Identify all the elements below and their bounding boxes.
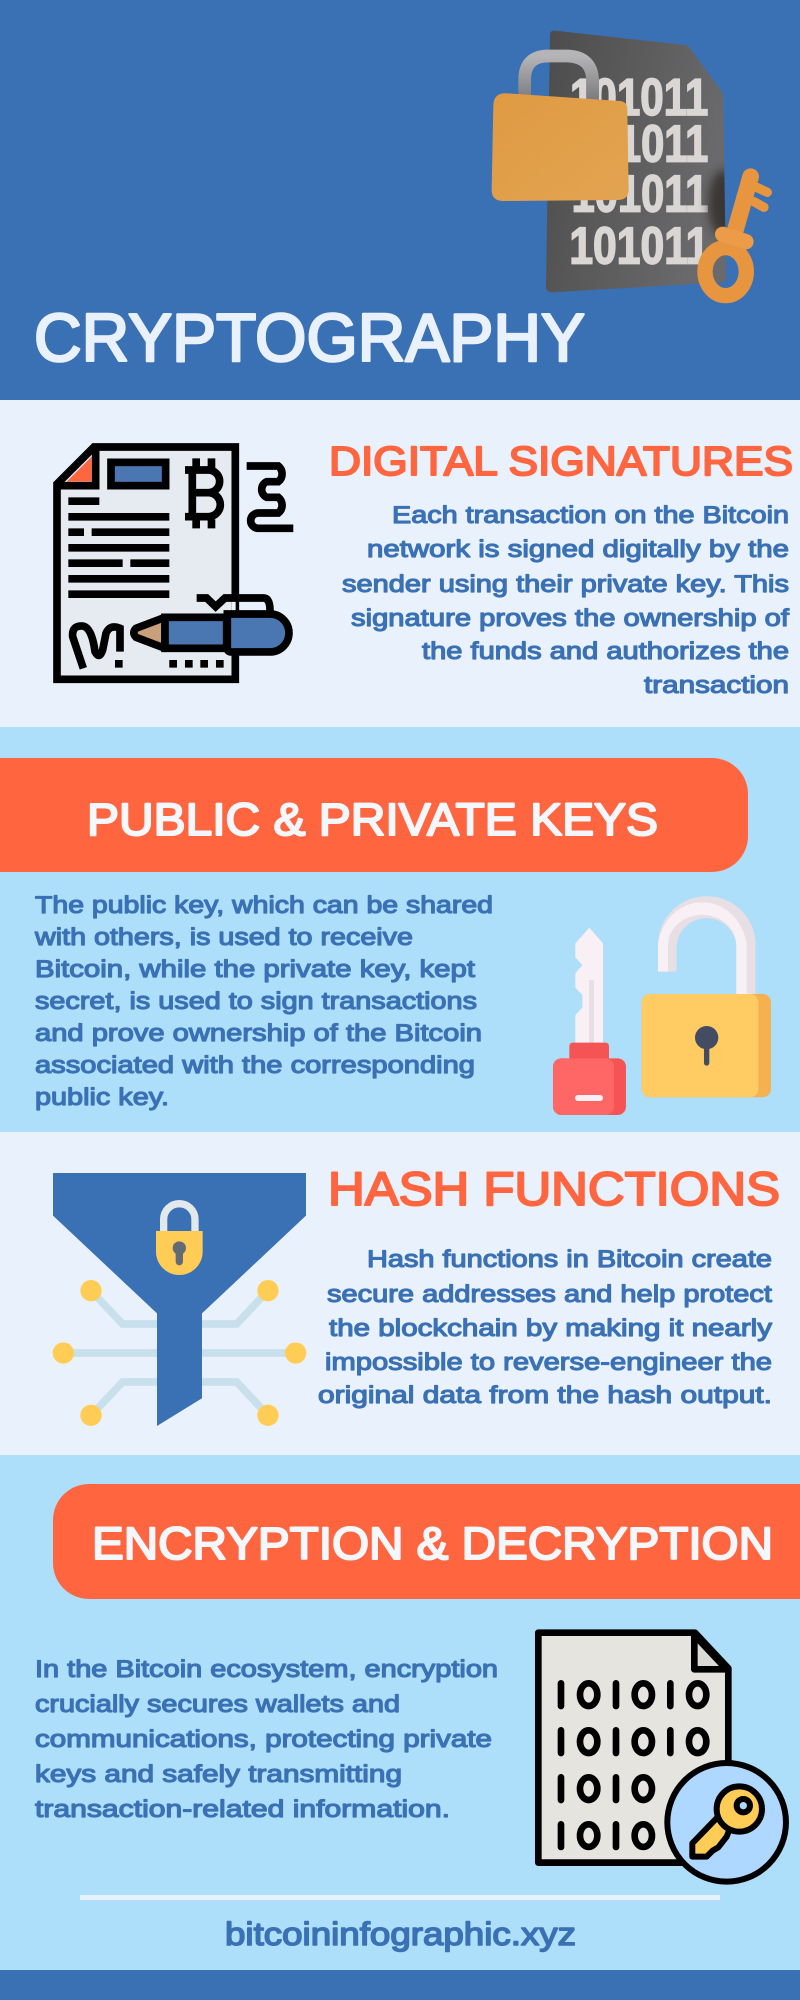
text block: public and private keys: public key. [35, 1084, 169, 1111]
heading banner: encryption and decryption: ENCRYPTION & DECRYPTION [92, 1518, 773, 1569]
heading: hash functions: HASH FUNCTIONS [328, 1162, 780, 1215]
text block: digital signatures [342, 502, 789, 699]
panel: header [0, 0, 800, 400]
panel: encryption and decryption [0, 1455, 800, 1970]
text block: hash functions [318, 1246, 773, 1409]
text block: digital signatures: sender using their private key. This [342, 571, 789, 598]
text block: hash functions: original data from the hash output. [318, 1382, 772, 1409]
title: CRYPTOGRAPHY [34, 300, 585, 376]
text block: public and private keys: secret, is used to sign transactions [35, 988, 477, 1015]
panel: public and private keys [0, 727, 800, 1132]
text block: digital signatures: Each transaction on the Bitcoin [392, 502, 789, 529]
text block: encryption and decryption [35, 1656, 498, 1823]
icon: 3D padlock, binary document and key: 101011 [572, 116, 708, 174]
icon: 3D padlock, binary document and key: 101011 [569, 217, 709, 275]
text block: public and private keys: with others, is used to receive [34, 924, 413, 951]
panel: hash functions [0, 1132, 800, 1455]
text block: digital signatures: the funds and authorizes the [422, 638, 789, 665]
text block: digital signatures: network is signed digitally by the [367, 536, 789, 563]
text block: encryption and decryption: crucially secures wallets and [35, 1691, 400, 1718]
text block: encryption and decryption: In the Bitcoin ecosystem, encryption [35, 1656, 498, 1683]
footer website: bitcoininfographic.xyz [225, 1916, 576, 1952]
text block: public and private keys: The public key, which can be shared [35, 892, 493, 919]
text block: digital signatures: transaction [644, 672, 789, 699]
text block: hash functions: the blockchain by making it nearly [329, 1315, 773, 1342]
icon: 3D padlock, binary document and key [492, 31, 767, 296]
icon: funnel with padlock and circuit nodes [53, 1173, 306, 1426]
icon: key and open padlock [553, 896, 771, 1115]
panel: digital signatures [0, 400, 800, 727]
text block: public and private keys: associated with the corresponding [35, 1052, 475, 1079]
text block: digital signatures: signature proves the ownership of [351, 605, 789, 632]
icon: 3D padlock, binary document and key: 101011 [570, 69, 708, 127]
icon: signed Bitcoin document and pen [57, 447, 293, 679]
text block: public and private keys: Bitcoin, while the private key, kept [35, 956, 475, 983]
text block: hash functions: impossible to reverse-engineer the [325, 1349, 772, 1376]
heading: digital signatures: DIGITAL SIGNATURES [329, 438, 793, 484]
text block: public and private keys [34, 892, 493, 1111]
heading banner: encryption and decryption [53, 1484, 800, 1599]
heading banner: public and private keys: PUBLIC & PRIVATE KEYS [87, 794, 658, 845]
icon: 3D padlock, binary document and key: 101011 [572, 166, 708, 224]
text block: hash functions: Hash functions in Bitcoin create [367, 1246, 772, 1273]
heading banner: public and private keys [0, 758, 748, 872]
text block: encryption and decryption: transaction-related information. [35, 1796, 450, 1823]
icon: binary document with key badge [538, 1633, 786, 1882]
text block: encryption and decryption: communications, protecting private [35, 1726, 492, 1753]
text block: hash functions: secure addresses and help protect [327, 1281, 772, 1308]
text block: encryption and decryption: keys and safely transmitting [35, 1761, 402, 1788]
text block: public and private keys: and prove ownership of the Bitcoin [35, 1020, 482, 1047]
bottom bar [0, 1970, 800, 2000]
